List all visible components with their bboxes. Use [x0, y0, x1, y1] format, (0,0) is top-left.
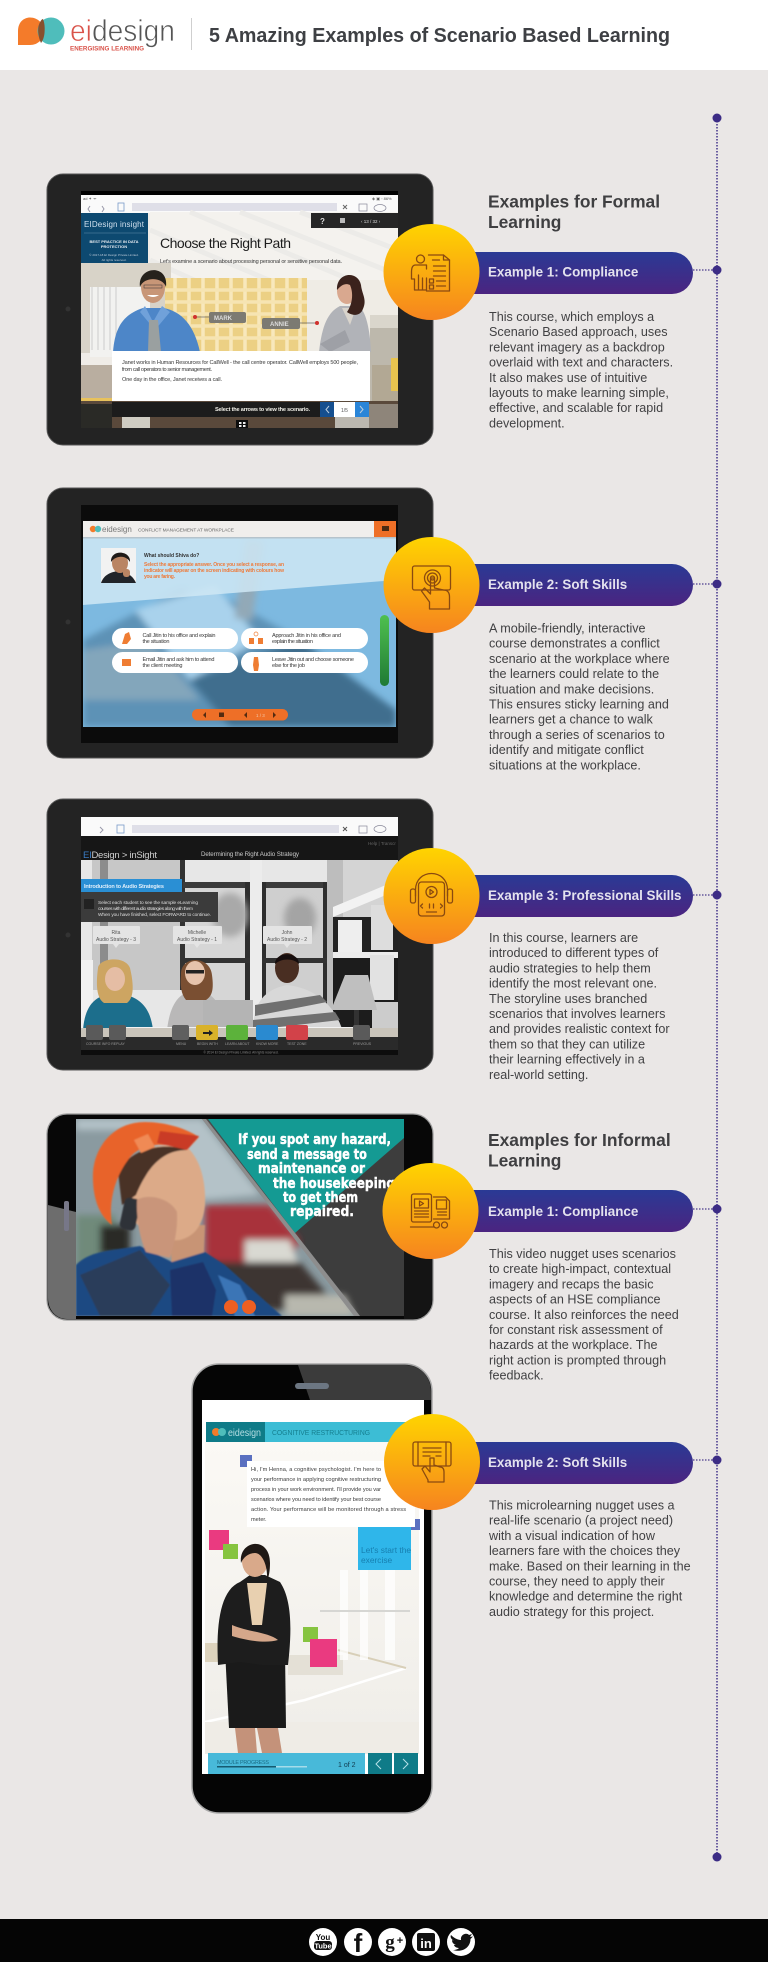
text: informal soft skills description: real-life scenario (a project need): [489, 1514, 673, 1528]
bottom strip: [81, 401, 398, 428]
student bubbles: Michelle: [188, 930, 206, 936]
answer buttons: Leave Jitin out and choose someone: [272, 657, 354, 663]
tablet 1: compliance course: Janet works in Human Resources for CallWell - the call centre operator. CallWell employs 500 people,: [122, 360, 358, 366]
tablet 1: compliance course: BEST PRACTICE IN DATA: [90, 239, 139, 244]
tablet 1: compliance course: ◈ ▣ ◦ 86%: [372, 196, 392, 201]
nav: [192, 709, 288, 720]
phone 5: cognitive restructuring microlearning: exercise: [361, 1555, 393, 1565]
text: professional skills description: [489, 931, 670, 1082]
example bar: soft skills: [470, 564, 722, 606]
tablet 3: professional skills course: Select each student to see the sample eLearning: [98, 900, 198, 906]
tablet 1: compliance course: ad ✦ ᯤ: [83, 196, 97, 201]
text: professional skills description: real-world setting.: [489, 1068, 588, 1082]
text: soft skills description: course demonstrates a conflict: [489, 637, 660, 651]
text: formal compliance description: overlaid with text and characters.: [489, 356, 673, 370]
text: formal compliance description: It also makes use of intuitive: [489, 371, 647, 385]
phone 5: cognitive restructuring microlearning: meter.: [251, 1517, 267, 1523]
tablet 3: professional skills course: When you have finished, select FORWARD to continue.: [98, 912, 211, 918]
text: informal soft skills description: learners fare with the choices they: [489, 1544, 681, 1558]
phone 5: cognitive restructuring microlearning: MODULE PROGRESS: [217, 1760, 269, 1766]
phone 5: cognitive restructuring microlearning: action. Your performance will be monitored through a stress: [251, 1507, 406, 1513]
text: informal soft skills description: course, they need to apply their: [489, 1574, 665, 1588]
course toolbar: MENU: [176, 1042, 187, 1046]
text: professional skills description: In this course, learners are: [489, 931, 638, 945]
text: soft skills description: through a series of scenarios to: [489, 728, 665, 742]
header band: [0, 0, 768, 70]
icon: google plus: g: [385, 1932, 395, 1953]
text: soft skills description: situation and make decisions.: [489, 682, 654, 696]
tablet 1: compliance course: One day in the office, Janet receives a call.: [122, 377, 222, 383]
icon: tablet with pointing hand: [384, 1414, 480, 1510]
text: soft skills description: learners get a chance to walk: [489, 713, 654, 727]
course toolbar: KNOW MORE: [256, 1042, 279, 1046]
tablet 2: soft skills course: Select the appropriate answer. Once you select a response, an: [144, 562, 284, 568]
white panel: [112, 351, 370, 401]
text: soft skills description: identify and mitigate conflict: [489, 743, 644, 757]
text: informal compliance description: [489, 1247, 679, 1383]
students: [83, 996, 153, 1028]
tablet 1: compliance course: MARK: [214, 316, 233, 322]
title: 5 Amazing Examples of Scenario Based Learning: [209, 25, 670, 47]
intro banner: [81, 879, 182, 892]
course toolbar: TEST ZONE: [287, 1042, 307, 1046]
phone 4: hazard video nugget: [47, 1114, 433, 1320]
phone 5: cognitive restructuring microlearning: 1 of 2: [338, 1762, 356, 1769]
icon: facebook: f: [354, 1928, 363, 1958]
mark: [113, 308, 200, 352]
text: informal compliance description: course. It also reinforces the need: [489, 1308, 679, 1322]
stress meter: [380, 615, 389, 686]
logo: [18, 14, 175, 52]
timeline: [712, 114, 722, 1862]
text: formal compliance description: relevant imagery as a backdrop: [489, 340, 665, 354]
helmet: [93, 1122, 199, 1225]
text: professional skills description: them so that they can utilize: [489, 1037, 645, 1051]
tablet 3: professional skills course: Help | Transcr: [368, 841, 396, 846]
hazard message: If you spot any hazard,: [238, 1132, 391, 1148]
example bar: professional skills: [470, 875, 722, 917]
text: soft skills description: [489, 622, 670, 772]
face: [124, 1145, 205, 1240]
text: soft skills description: This ensures sticky learning and: [489, 698, 669, 712]
section heading: informal learning: [488, 1130, 671, 1170]
text: formal compliance description: development.: [489, 416, 565, 430]
answer buttons: Call Jitin to his office and explain: [142, 633, 216, 639]
tablet 3: professional skills course: EIDesign > inSight: [83, 850, 157, 861]
course toolbar: PREVIOUS: [353, 1042, 372, 1046]
icon: youtube: [309, 1928, 337, 1956]
section heading: informal learning: Examples for Informal: [488, 1130, 671, 1150]
hazard message: maintenance or: [258, 1161, 365, 1177]
text: informal soft skills description: with a visual indication of how: [488, 1529, 656, 1543]
phone 5: cognitive restructuring microlearning: [192, 1364, 432, 1813]
tablet 1: compliance course: [47, 174, 433, 445]
icon: linkedin: [412, 1928, 440, 1956]
logo: eidesign: [70, 14, 175, 48]
course toolbar: BEGIN WITH: [197, 1042, 218, 1046]
tablet 2: soft skills course: What should Shiva do?: [144, 553, 199, 559]
tablet 1: compliance course: from call operators to senior management.: [122, 367, 212, 373]
labels: [197, 316, 209, 318]
tablet 1: compliance course: All rights reserved.: [102, 258, 127, 262]
phone 5: cognitive restructuring microlearning: Let's start the: [361, 1545, 411, 1555]
example bar: informal soft skills: [470, 1442, 722, 1484]
text: informal compliance description: This video nugget uses scenarios: [489, 1247, 676, 1261]
phone 5: cognitive restructuring microlearning: eidesign: [228, 1428, 261, 1439]
icon: person with checklist: [384, 224, 480, 320]
example bar: formal compliance: [470, 252, 722, 294]
icon: video and document: [382, 1163, 478, 1259]
example bar: professional skills: Example 3: Professional Skills: [488, 888, 682, 903]
text: informal soft skills description: [488, 1498, 691, 1619]
text: informal compliance description: imagery and recaps the basic: [489, 1277, 654, 1291]
text: professional skills description: audio strategies to help them: [489, 961, 651, 975]
icon: facebook: [344, 1928, 372, 1958]
example bar: informal compliance: Example 1: Compliance: [488, 1204, 638, 1219]
tablet 1: compliance course: © 2017-18 EI Design Private Limited.: [89, 253, 139, 257]
text: informal compliance description: to create high-impact, contextual: [489, 1262, 671, 1276]
hazard message: [238, 1132, 395, 1220]
text: informal compliance description: right action is prompted through: [489, 1353, 666, 1367]
tablet 2: soft skills course: 1 / 3: [256, 713, 265, 718]
section heading: formal learning: [488, 192, 660, 232]
tablet 1: compliance course: EIDesign insight: [84, 220, 145, 229]
logo box: [81, 213, 148, 263]
answer buttons: explain the situation: [272, 639, 313, 645]
section heading: formal learning: Learning: [488, 212, 561, 232]
icon: youtube: You: [316, 1933, 330, 1942]
icon: twitter: [447, 1928, 475, 1956]
phone 5: cognitive restructuring microlearning: your performance in applying cognitive restructuring: [251, 1477, 381, 1483]
icon: headphones with tablet: [384, 848, 480, 944]
tablet 1: compliance course: Select the arrows to view the scenario.: [215, 407, 310, 413]
student bubbles: John: [282, 930, 293, 936]
text: formal compliance description: effective, and scalable for rapid: [489, 401, 663, 415]
hazard message: to get them: [283, 1190, 358, 1206]
tablet 3: professional skills course: [47, 799, 433, 1070]
tablet 3: professional skills course: Introduction to Audio Strategies: [84, 884, 164, 890]
text: formal compliance description: layouts to make learning simple,: [489, 386, 669, 400]
phone 5: cognitive restructuring microlearning: Hi, I'm Henna, a cognitive psychologist. I'm here to: [251, 1467, 381, 1473]
text: professional skills description: and provides realistic context for: [489, 1022, 670, 1036]
text: soft skills description: situations at the workplace.: [489, 758, 641, 772]
tablet 3: professional skills course: Determining the Right Audio Strategy: [201, 851, 300, 858]
hazard message: send a message to: [247, 1147, 367, 1163]
tablet 1: compliance course: ANNIE: [270, 322, 289, 328]
phone 5: cognitive restructuring microlearning: process in your work environment. I'll provide you var: [251, 1487, 381, 1493]
text: soft skills description: A mobile-friendly, interactive: [489, 622, 646, 636]
text: formal compliance description: This course, which employs a: [489, 310, 654, 324]
logo: ENERGISING LEARNING: [70, 46, 144, 52]
tablet 2: soft skills course: you are faring.: [144, 574, 176, 580]
text: informal compliance description: hazards at the workplace. The: [489, 1338, 657, 1352]
text: informal soft skills description: make. Based on their learning in the: [489, 1559, 691, 1573]
course toolbar: [81, 1025, 398, 1055]
text: informal compliance description: for constant risk assessment of: [489, 1323, 663, 1337]
hazard message: repaired.: [290, 1204, 354, 1220]
phone 5: cognitive restructuring microlearning: scenarios where you need to identify your best course: [251, 1497, 381, 1503]
annie: [319, 306, 371, 352]
example bar: informal soft skills: Example 2: Soft Skills: [488, 1455, 627, 1470]
student bubbles: Audio Strategy - 3: [96, 937, 136, 943]
hazard message: the housekeeping: [273, 1176, 395, 1192]
tablet 1: compliance course: 1/5: [341, 408, 348, 414]
section heading: informal learning: Learning: [488, 1150, 561, 1170]
text: soft skills description: scenario at the workplace where: [489, 652, 670, 666]
portrait: [101, 548, 136, 583]
tablet 1: compliance course: Let's examine a scenario about processing personal or sensitive personal data.: [160, 259, 342, 265]
icon: touch screen: [384, 537, 480, 633]
course toolbar: COURSE INFO REPLAY: [86, 1042, 125, 1046]
text: professional skills description: identify the most relevant one.: [489, 977, 657, 991]
text: informal soft skills description: This microlearning nugget uses a: [489, 1498, 675, 1512]
neck and jacket: [170, 1224, 206, 1263]
student bubbles: Audio Strategy - 1: [177, 937, 217, 943]
student bubbles: Audio Strategy - 2: [267, 937, 307, 943]
student bubbles: [93, 926, 312, 948]
course toolbar: © 2014 EI Design Private Limited. All rights reserved.: [204, 1050, 279, 1054]
tablet 1: compliance course: PROTECTION: [101, 244, 127, 249]
footer with social icons: [0, 1919, 768, 1962]
icon: linkedin: in: [420, 1936, 432, 1951]
toolbar: [311, 213, 398, 228]
answer buttons: Email Jitin and ask him to attend: [142, 657, 214, 663]
student bubbles: Rita: [112, 930, 121, 936]
example bar: soft skills: Example 2: Soft Skills: [488, 577, 627, 592]
progress bar: [208, 1753, 365, 1774]
section heading: formal learning: Examples for Formal: [488, 192, 660, 212]
text: informal soft skills description: audio strategy for this project.: [489, 1605, 654, 1619]
text: formal compliance description: Scenario Based approach, uses: [489, 325, 668, 339]
icon: youtube: Tube: [314, 1942, 332, 1950]
tablet 3: professional skills course: courses with different audio strategies along with them: [98, 906, 193, 912]
answer buttons: Approach Jitin in his office and: [272, 633, 341, 639]
woman: [235, 1728, 282, 1753]
answer buttons: the client meeting: [142, 663, 182, 669]
text: formal compliance description: [489, 310, 673, 430]
text: professional skills description: their learning effectively in a: [489, 1053, 645, 1067]
tablet 2: soft skills course: indicator will appear on the screen indicating with colours how: [144, 568, 284, 574]
teal triangle: [208, 1119, 404, 1233]
text: informal compliance description: feedback.: [489, 1369, 544, 1383]
text: professional skills description: The storyline uses branched: [489, 992, 647, 1006]
tablet 2: soft skills course: CONFLICT MANAGEMENT AT WORKPLACE: [138, 528, 234, 534]
text: professional skills description: introduced to different types of: [489, 946, 659, 960]
phone 5: cognitive restructuring microlearning: COGNITIVE RESTRUCTURING: [272, 1428, 370, 1437]
tablet 1: compliance course: ‹ 13 / 32 ›: [361, 219, 381, 224]
tablet 2: soft skills course: eidesign: [102, 525, 132, 534]
text: informal compliance description: aspects of an HSE compliance: [489, 1293, 661, 1307]
icon: google plus: [378, 1928, 406, 1956]
tablet 1: compliance course: ?: [320, 217, 325, 226]
example bar: formal compliance: Example 1: Compliance: [488, 264, 638, 280]
text: professional skills description: scenarios that involves learners: [489, 1007, 665, 1021]
screen title: Choose the Right Path: [160, 235, 291, 251]
answer buttons: else for the job: [272, 663, 305, 669]
text: soft skills description: the learners could relate to the: [489, 667, 659, 681]
example bar: informal compliance: [470, 1190, 722, 1232]
answer buttons: [112, 628, 368, 673]
answer buttons: the situation: [142, 639, 170, 645]
tablet 2: soft skills course: [47, 488, 433, 758]
course toolbar: LEARN ABOUT: [225, 1042, 250, 1046]
text: informal soft skills description: knowledge and determine the right: [489, 1590, 683, 1604]
phone and hand: [119, 1197, 138, 1231]
icon: google plus: +: [397, 1935, 403, 1947]
